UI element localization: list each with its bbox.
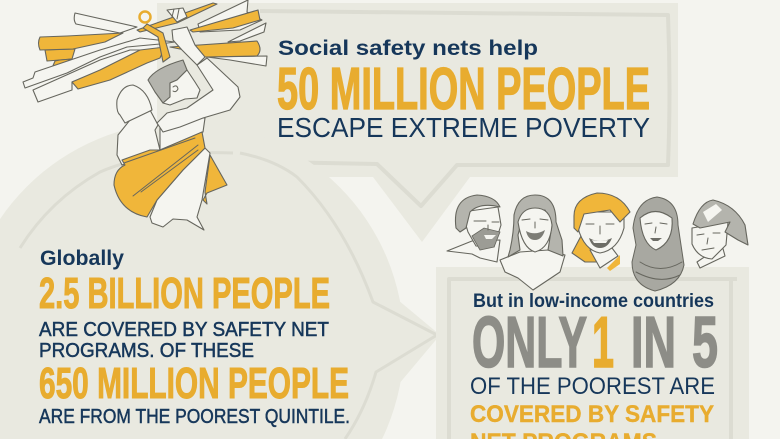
text: escape extreme poverty: ESCAPE EXTREME POVERTY — [277, 112, 650, 143]
mother's hair — [148, 60, 187, 103]
portrait: girl with patterned scarf — [692, 200, 748, 268]
heading: only 1 in 5: IN — [631, 303, 676, 383]
portrait: woman with yellow head wrap — [572, 193, 630, 271]
icon: woman carrying bundle of sticks with baby — [23, 0, 267, 230]
text: are covered by safety net programs: ARE COVERED BY SAFETY NET — [39, 319, 329, 341]
text: covered by safety net programs — [470, 401, 714, 439]
text: social safety nets help: Social safety nets help — [278, 37, 538, 60]
panel: low-income countries box — [436, 267, 749, 439]
rope tie — [140, 12, 170, 62]
heading: 650 million people: 650 MILLION PEOPLE — [39, 359, 349, 408]
yellow baby sling — [114, 132, 205, 217]
skirt — [150, 148, 210, 230]
portrait: woman in hijab — [632, 197, 684, 291]
heading: only 1 in 5: 1 — [592, 303, 614, 383]
text: are from the poorest quintile: ARE FROM THE POOREST QUINTILE. — [39, 406, 350, 428]
back sling tail — [203, 155, 227, 204]
icon: five portraits — [447, 193, 748, 291]
mother's face and arm — [157, 8, 240, 150]
heading: 2.5 billion people: 2.5 BILLION PEOPLE — [39, 269, 330, 318]
text: are covered by safety net programs: PROGRAMS. OF THESE — [39, 340, 254, 362]
panel: top speech bubble — [157, 3, 678, 242]
text: of the poorest are: OF THE POOREST ARE — [470, 373, 715, 400]
text: but in low-income countries: But in low-income countries — [473, 291, 714, 312]
portrait: bearded man — [447, 195, 501, 262]
heading: only 1 in 5: ONLY — [472, 303, 587, 383]
heading: only 1 in 5: 5 — [692, 303, 718, 383]
portrait: smiling woman with lace collar — [500, 195, 565, 290]
text: are covered by safety net programs — [39, 319, 329, 362]
bundle of sticks — [23, 0, 267, 102]
panel: round speech bubble — [0, 122, 440, 439]
baby — [117, 85, 160, 165]
text: globally: Globally — [40, 247, 124, 270]
text: covered by safety net programs: COVERED BY SAFETY — [470, 401, 714, 428]
